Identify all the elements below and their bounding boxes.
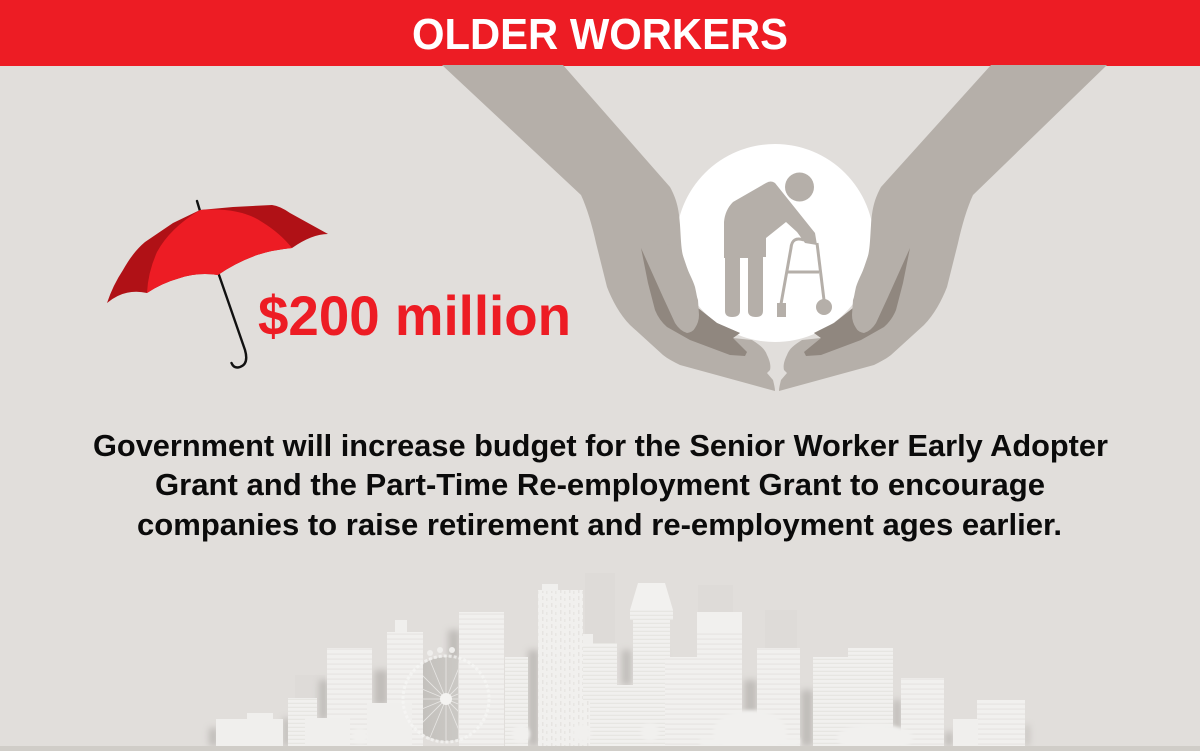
hand shadow — [641, 248, 747, 356]
thumb — [852, 240, 910, 333]
walker — [781, 239, 824, 304]
buildings front row — [216, 612, 1025, 746]
description text — [93, 428, 1108, 542]
canopy bright panel — [147, 210, 292, 293]
thumb — [641, 240, 699, 333]
cast shadows between buildings — [209, 630, 1029, 746]
title: OLDER WORKERS — [412, 10, 788, 59]
walker ball — [816, 299, 832, 315]
ground strip — [0, 746, 1200, 751]
skyline illustration — [209, 573, 1029, 751]
hand shadow — [804, 248, 910, 356]
budget figure: $200 million — [258, 284, 571, 347]
buildings back row — [327, 584, 893, 746]
icon: left hand — [442, 65, 775, 391]
trees — [352, 710, 913, 751]
icon: elderly person with walker — [724, 172, 832, 317]
faint distant buildings — [295, 573, 797, 700]
walker foot — [777, 303, 786, 317]
icon: right hand — [779, 65, 1107, 391]
header bar — [0, 0, 1200, 66]
canopy dark panels — [107, 205, 328, 303]
description text: companies to raise retirement and re-employment ages earlier. — [137, 507, 1062, 542]
description text: Grant and the Part-Time Re-employment Grant to encourage — [155, 467, 1045, 502]
head — [785, 172, 814, 202]
icon: red umbrella — [107, 201, 328, 368]
pyramid top of tower — [630, 583, 673, 610]
description text: Government will increase budget for the Senior Worker Early Adopter — [93, 428, 1108, 463]
umbrella shaft and hook — [197, 201, 246, 368]
body and legs — [724, 182, 817, 317]
white circle — [676, 144, 874, 342]
ferris wheel — [402, 647, 490, 743]
